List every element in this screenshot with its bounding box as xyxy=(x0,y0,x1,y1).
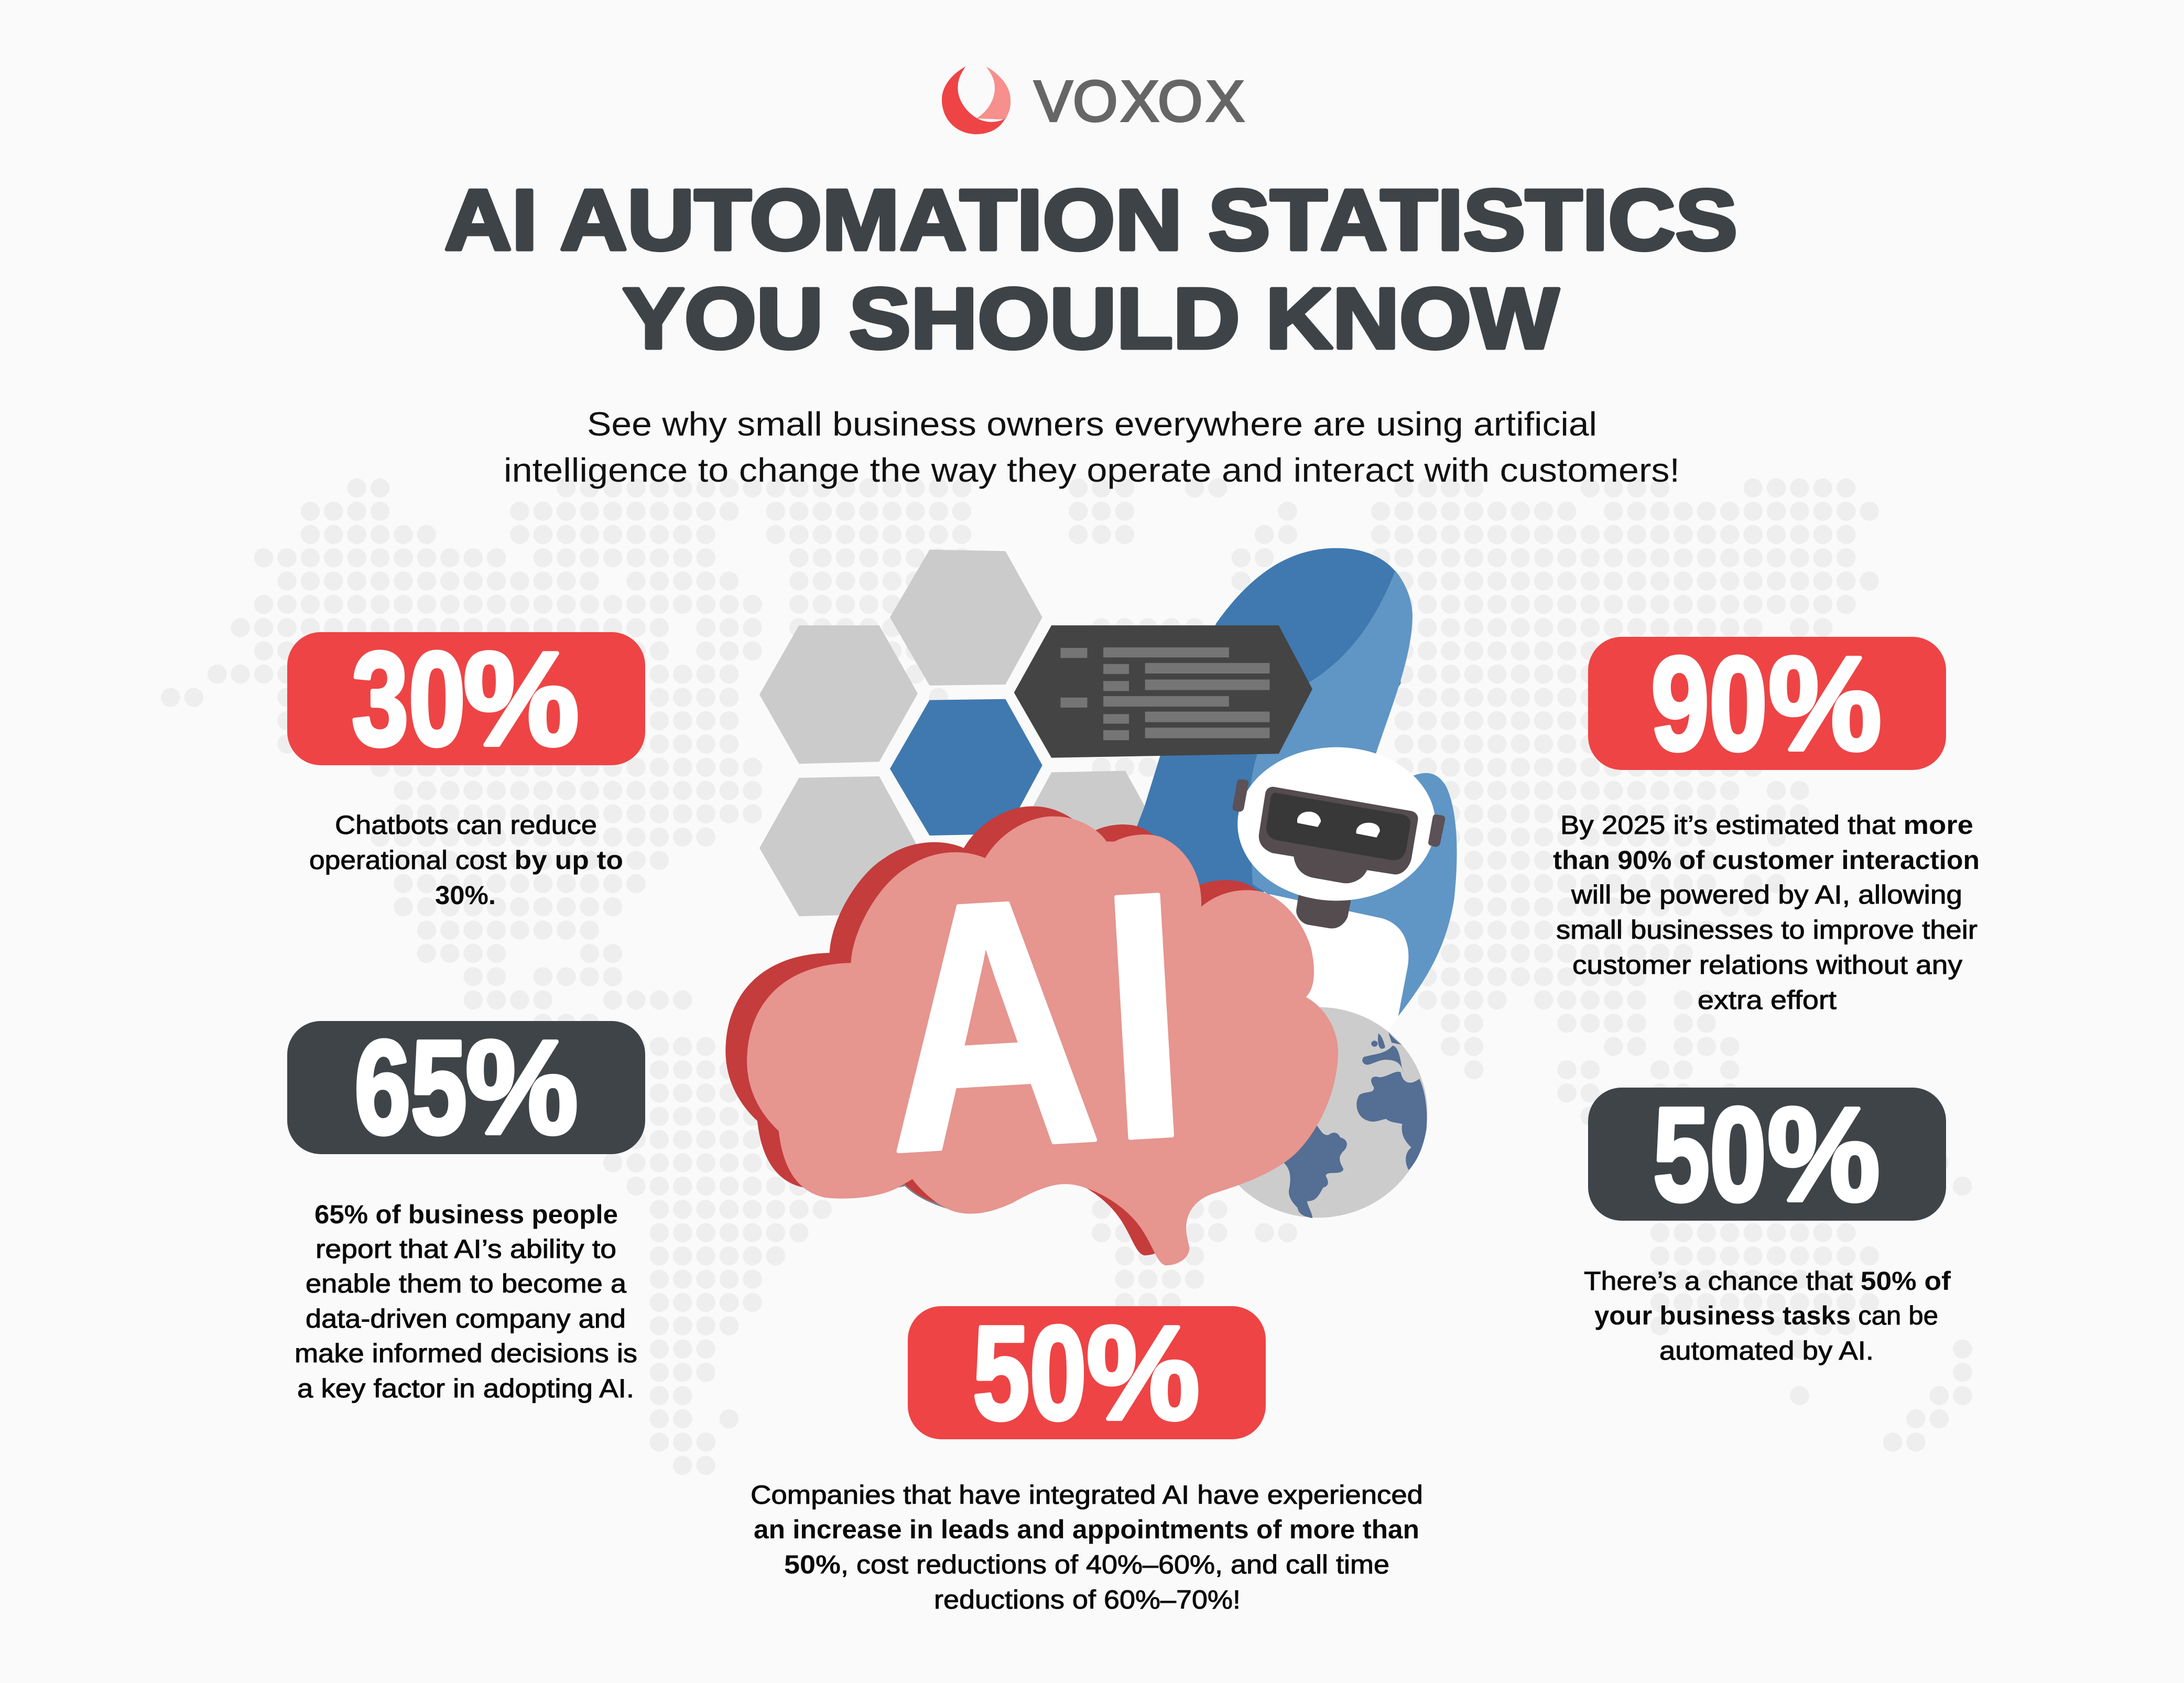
text: business tasks: automated by AI. xyxy=(1659,1336,1874,1365)
subtitle xyxy=(504,405,1680,489)
text: business people: make informed decisions is xyxy=(295,1339,637,1368)
globe xyxy=(1208,1007,1427,1218)
text: leads and appointments: reductions of 60%–70%! xyxy=(934,1585,1241,1614)
logo: VOXOX xyxy=(942,67,1244,134)
text: business tasks: There’s a chance that 50% of xyxy=(1584,1266,1951,1296)
text: leads and appointments: Companies that have integrated AI have experienced xyxy=(751,1480,1423,1510)
badge: 65% xyxy=(287,1013,645,1161)
cloud lettering: AI: AI xyxy=(873,818,1196,1226)
panel: stat 50% tasks xyxy=(1584,1080,1951,1365)
text: chatbots: Chatbots can reduce xyxy=(335,810,597,840)
subtitle: intelligence to change the way they operate and interact with customers! xyxy=(504,451,1680,489)
text: customer interaction: than 90% of customer interaction xyxy=(1553,845,1980,875)
badge: 50% dark: 50 xyxy=(1653,1080,1766,1229)
title: AI AUTOMATION STATISTICS xyxy=(444,172,1737,268)
text: leads and appointments: 50%, cost reductions of 40%–60%, and call time xyxy=(784,1550,1389,1579)
badge: 30%: % xyxy=(463,624,579,773)
subtitle: See why small business owners everywhere are using artificial xyxy=(587,405,1597,443)
panel: stat 65% xyxy=(287,1013,645,1403)
text: leads and appointments xyxy=(751,1480,1423,1614)
text: business tasks xyxy=(1584,1266,1951,1365)
hexagon cluster xyxy=(759,550,1161,916)
badge: 90%: % xyxy=(1768,629,1882,778)
icon: logo crescent xyxy=(942,67,1010,134)
text: leads and appointments: an increase in leads and appointments of more than xyxy=(754,1515,1419,1544)
badge: 30% xyxy=(287,624,645,773)
badge: 90% xyxy=(1588,629,1946,778)
AI speech cloud xyxy=(725,806,1338,1265)
text: business people xyxy=(295,1200,637,1403)
central illustration xyxy=(725,548,1457,1265)
text: chatbots xyxy=(309,810,623,910)
background: dotted world map xyxy=(171,488,1965,1465)
panel: stat 50% leads xyxy=(751,1298,1423,1614)
panel: stat 90% xyxy=(1553,629,1980,1015)
panel: stat 30% xyxy=(287,624,645,910)
text: customer interaction: By 2025 it’s estimated that more xyxy=(1560,810,1973,840)
badge: 50% red: 50 xyxy=(973,1298,1086,1447)
text: business people: a key factor in adopting AI. xyxy=(297,1374,634,1403)
text: chatbots: 30%. xyxy=(435,881,496,910)
text: customer interaction xyxy=(1553,810,1980,1015)
text: business people: data-driven company and xyxy=(306,1304,626,1333)
badge: 30%: 30 xyxy=(352,624,465,773)
text: customer interaction: small businesses to improve their xyxy=(1556,915,1977,944)
title: YOU SHOULD KNOW xyxy=(623,270,1559,366)
badge: 90%: 90 xyxy=(1651,629,1767,778)
badge: 50% dark xyxy=(1588,1080,1946,1229)
text: customer interaction: will be powered by AI, allowing xyxy=(1571,880,1962,909)
text: business people: enable them to become a xyxy=(306,1269,626,1298)
badge: 50% red: % xyxy=(1086,1298,1200,1447)
text: business people: 65% of business people xyxy=(314,1200,618,1229)
text: business tasks: your business tasks can be xyxy=(1594,1301,1938,1330)
robot xyxy=(1233,747,1445,1035)
badge: 65%: % xyxy=(465,1013,578,1161)
badge: 50% dark: % xyxy=(1767,1080,1880,1229)
text: chatbots: operational cost by up to xyxy=(309,845,623,875)
badge: 65%: 65 xyxy=(354,1013,467,1161)
text: customer interaction: extra effort xyxy=(1698,985,1837,1015)
blue swoosh behind robot xyxy=(1109,548,1457,1029)
title xyxy=(444,172,1737,366)
logo wordmark: VOXOX xyxy=(1034,69,1244,134)
text: business people: report that AI’s ability to xyxy=(316,1234,616,1264)
badge: 50% red xyxy=(908,1298,1266,1447)
text: customer interaction: customer relations without any xyxy=(1572,950,1962,980)
code panel hexagon xyxy=(1014,625,1312,758)
